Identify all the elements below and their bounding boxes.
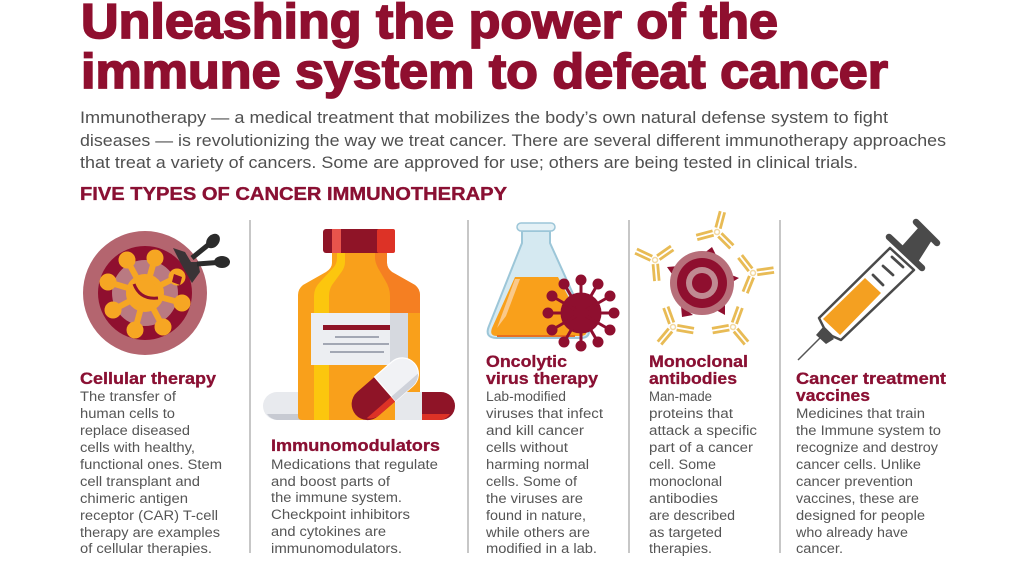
panel: cancer treatment vaccines [795, 370, 947, 556]
heading: Oncolytic [486, 353, 567, 371]
description: immunomodulators. [271, 541, 402, 556]
intro text: Immunotherapy — a medical treatment that mobilizes the body’s own natural defense system to fight [80, 109, 888, 127]
description: human cells to [80, 406, 175, 421]
description: cells with healthy, [80, 440, 195, 455]
description: cancer cells. Unlike [796, 457, 921, 472]
intro text: that treat a variety of cancers. Some are approved for use; others are being tested in clinical trials. [80, 154, 858, 172]
description: Checkpoint inhibitors [271, 507, 410, 522]
title [81, 0, 888, 99]
description: harming normal [486, 457, 589, 472]
description: who already have [795, 525, 908, 540]
description: The transfer of [80, 389, 176, 404]
icon: cell with antibodies [634, 207, 776, 345]
title: immune system to defeat cancer [81, 45, 888, 99]
heading: Monoclonal [649, 353, 748, 371]
description: Man-made [649, 389, 712, 404]
description: found in nature, [486, 508, 586, 523]
description: cells without [486, 440, 568, 455]
heading [486, 353, 599, 388]
description: part of a cancer [649, 440, 754, 455]
description: and boost parts of [271, 474, 390, 489]
description: viruses that infect [486, 406, 603, 421]
description: modified in a lab. [486, 541, 597, 556]
description: the Immune system to [796, 423, 941, 438]
description: are described [649, 508, 735, 523]
heading: vaccines [796, 387, 870, 405]
pill: right [395, 392, 455, 420]
description [485, 389, 603, 556]
intro text [80, 109, 946, 172]
description: cell. Some [649, 457, 716, 472]
heading [796, 370, 947, 405]
description: attack a specific [649, 423, 757, 438]
panel: monoclonal antibodies [649, 353, 757, 556]
heading: Cellular therapy [80, 370, 217, 388]
heading: Cancer treatment [796, 370, 947, 388]
description: cancer. [796, 541, 843, 556]
description: chimeric antigen [80, 491, 188, 506]
description: cells. Some of [486, 474, 577, 489]
description: replace diseased [80, 423, 190, 438]
description: therapy are examples [80, 525, 220, 540]
bottle cap [323, 229, 395, 253]
bottle body [298, 253, 420, 420]
virus [542, 274, 620, 352]
panel: immunomodulators [271, 437, 440, 556]
description: antibodies [649, 491, 718, 506]
description: proteins that [649, 406, 733, 421]
description: Lab-modified [486, 389, 566, 404]
icon: medicine bottle with pills [263, 229, 455, 427]
description: cell transplant and [80, 474, 200, 489]
icon: syringe [798, 222, 937, 360]
icon: cancer cell attacked by T-cell [83, 231, 230, 355]
description: vaccines, these are [796, 491, 919, 506]
description: and kill cancer [486, 423, 585, 438]
pill: tilted [345, 351, 425, 427]
description [649, 389, 757, 556]
description: the immune system. [271, 490, 402, 505]
description: cancer prevention [796, 474, 913, 489]
description: monoclonal [649, 474, 722, 489]
heading [649, 353, 748, 388]
heading: virus therapy [486, 370, 599, 388]
description: the viruses are [486, 491, 583, 506]
heading: antibodies [649, 370, 737, 388]
description: of cellular therapies. [80, 541, 212, 556]
description: Medications that regulate [271, 457, 438, 472]
pill: left [263, 392, 302, 420]
description: designed for people [796, 508, 925, 523]
panel: cellular therapy [80, 370, 222, 556]
intro text: diseases — is revolutionizing the way we treat cancer. There are several different immunotherapy approaches [80, 132, 946, 150]
description [271, 457, 438, 556]
description: and cytokines are [271, 524, 386, 539]
panel: oncolytic virus therapy [485, 353, 603, 556]
bottle label [311, 313, 408, 365]
icon: flask with virus [488, 223, 620, 352]
description [80, 389, 222, 556]
description: receptor (CAR) T-cell [80, 508, 218, 523]
heading: Immunomodulators [271, 437, 440, 455]
description: functional ones. Stem [80, 457, 222, 472]
description: recognize and destroy [796, 440, 938, 455]
description: therapies. [649, 541, 712, 556]
description: while others are [485, 525, 590, 540]
section heading: FIVE TYPES OF CANCER IMMUNOTHERAPY [80, 184, 507, 204]
description [795, 406, 941, 556]
description: as targeted [649, 525, 722, 540]
description: Medicines that train [796, 406, 925, 421]
